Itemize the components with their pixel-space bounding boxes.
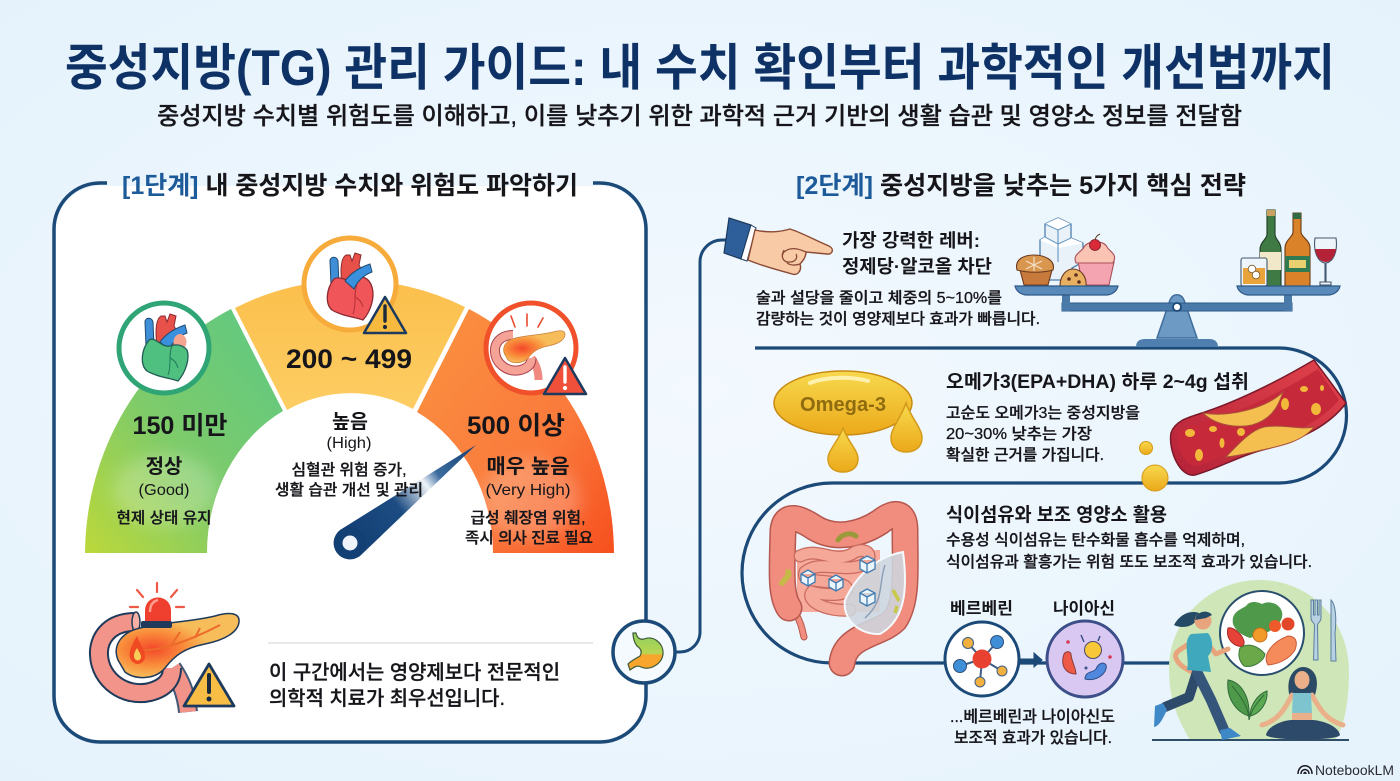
heading: step 2: [2단계] 중성지방을 낮추는 5가지 핵심 전략 <box>796 172 1246 200</box>
subtitle: 중성지방 수치별 위험도를 이해하고, 이를 낮추기 위한 과학적 근거 기반의 생활 습관 및 영양소 정보를 전달함 <box>157 103 1242 130</box>
text: berberine and niacin note: ...베르베린과 나이아신도 <box>950 708 1115 726</box>
text: strategy 2: 고순도 오메가3는 중성지방을 <box>946 404 1140 422</box>
text: strategy 3: 식이섬유와 보조 영양소 활용 <box>946 504 1167 526</box>
label: normal range: (Good) <box>138 482 190 499</box>
text: strategy 1: 술과 설당을 줄이고 체중의 5~10%를 <box>756 289 1002 307</box>
label: high range: 심혈관 위험 증가, <box>292 461 406 479</box>
illustration: intestine with fiber <box>782 514 905 663</box>
text: strategy 2 <box>946 371 1249 464</box>
label: very high range <box>465 412 593 547</box>
text: strategy 3: 식이섬유과 활흥가는 위험 또도 보조적 효과가 있습니다. <box>946 553 1312 571</box>
label: very high range: (Very High) <box>486 482 570 499</box>
label: very high range: 족시 의사 진료 필요 <box>465 529 593 547</box>
text: strategy 3 <box>946 504 1312 571</box>
label: very high range: 500 이상 <box>467 412 565 440</box>
serpentine path <box>742 348 1346 663</box>
callout text: 의학적 치료가 최우선입니다. <box>269 687 505 710</box>
text: strategy 2: 오메가3(EPA+DHA) 하루 2~4g 섭취 <box>946 371 1249 393</box>
illustration: omega-3 capsule and drops <box>774 371 922 472</box>
gauge chart <box>85 280 614 553</box>
label: normal range: 정상 <box>146 455 182 478</box>
icon: stomach <box>613 621 675 683</box>
label: high range <box>275 344 423 499</box>
leaves <box>1228 680 1267 720</box>
icon: green heart <box>119 303 209 393</box>
label: normal range <box>116 412 228 527</box>
left pan: sweets <box>1015 218 1118 295</box>
panel: step 1 risk gauge <box>54 183 646 742</box>
illustration: artery with plaque <box>1140 360 1346 491</box>
gauge needle <box>334 445 476 559</box>
text: strategy 2: 20~30% 낮추는 가장 <box>946 425 1092 443</box>
text: strategy 1: 감량하는 것이 영양제보다 효과가 빠릅니다. <box>756 310 1040 328</box>
text: strategy 1: 가장 강력한 레버: <box>842 230 980 251</box>
text: strategy 1: 정제당·알코올 차단 <box>842 256 992 277</box>
text: strategy 1 <box>756 230 1040 328</box>
arrow: berberine to niacin <box>1020 653 1042 667</box>
icon: inflamed pancreas with warning <box>486 303 586 394</box>
icon: cell <box>1047 621 1123 697</box>
label: high range: 높음 <box>332 411 368 433</box>
NotebookLM watermark: NotebookLM <box>1315 762 1394 778</box>
illustration: healthy lifestyle <box>1152 580 1349 740</box>
icon: red heart with warning <box>304 238 406 333</box>
gauge segment: normal <box>85 309 283 553</box>
icon: molecule <box>945 622 1019 696</box>
gauge segment: high <box>235 280 465 410</box>
icon: pancreas alert <box>99 583 239 712</box>
text: berberine and niacin note <box>950 708 1115 747</box>
text: berberine and niacin note: 보조적 효과가 있습니다. <box>954 729 1112 747</box>
callout text <box>269 661 560 710</box>
label: high range: 200 ~ 499 <box>286 344 412 374</box>
label: normal range: 현제 상태 유지 <box>116 509 212 527</box>
connector line from step 1 to step 2 <box>676 240 728 652</box>
icon: warning triangle <box>184 664 234 706</box>
label: normal range: 150 미만 <box>132 412 228 440</box>
meditating woman <box>1262 667 1343 740</box>
label: very high range: 매우 높음 <box>486 455 570 478</box>
right pan: alcohol <box>1237 210 1340 295</box>
food plate <box>1220 591 1304 675</box>
text: strategy 2: 확실한 근거를 가집니다. <box>946 446 1104 464</box>
icon: warning triangle <box>364 297 406 333</box>
label: berberine: 베르베린 <box>950 599 1013 618</box>
label: high range: (High) <box>326 435 372 452</box>
icon: pointing hand <box>724 218 832 274</box>
label: niacin: 나이아신 <box>1053 599 1115 618</box>
fork and knife <box>1311 600 1336 661</box>
title: 중성지방(TG) 관리 가이드: 내 수치 확인부터 과학적인 개선법까지 <box>65 40 1335 96</box>
capsule label: Omega-3 <box>800 394 886 416</box>
illustration: balance scale <box>1015 210 1340 347</box>
icon: warning triangle <box>544 358 586 394</box>
heading: step 1: [1단계] 내 중성지방 수치와 위험도 파악하기 <box>122 172 578 200</box>
label: high range: 생활 습관 개선 및 관리 <box>275 481 423 499</box>
gauge segment: very high <box>417 309 614 553</box>
runner <box>1154 612 1241 740</box>
icon: siren <box>130 583 184 628</box>
text: strategy 3: 수용성 식이섬유는 탄수화물 흡수를 억제하며, <box>946 531 1245 549</box>
label: very high range: 급성 췌장염 위험, <box>470 509 586 527</box>
callout text: 이 구간에서는 영양제보다 전문적인 <box>269 661 560 684</box>
